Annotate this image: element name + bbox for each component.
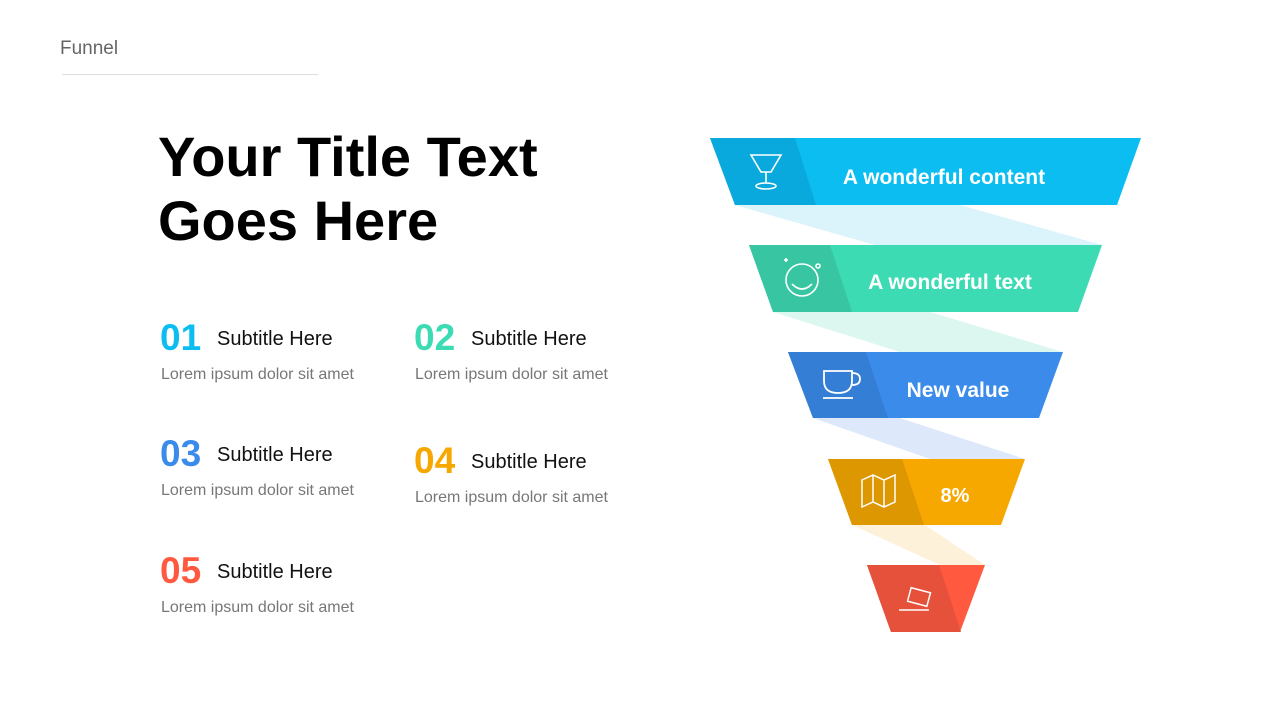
icon: eraser	[899, 588, 930, 610]
band 4	[828, 459, 1025, 525]
title: Goes Here	[158, 189, 438, 252]
item 02: Subtitle Here	[471, 328, 587, 350]
title	[158, 125, 538, 252]
item 01	[160, 317, 354, 383]
icon: face	[784, 258, 820, 296]
band 1: A wonderful content	[843, 166, 1045, 189]
item 02: Lorem ipsum dolor sit amet	[415, 366, 608, 383]
item 04: 04	[414, 440, 455, 481]
band 3: New value	[907, 379, 1009, 402]
item 03: Lorem ipsum dolor sit amet	[161, 482, 354, 499]
band 5	[867, 565, 985, 632]
item 05	[160, 550, 354, 616]
item 02	[414, 317, 608, 383]
icon: trophy	[751, 155, 781, 189]
band 4: 8%	[941, 485, 970, 507]
item 01: Lorem ipsum dolor sit amet	[161, 366, 354, 383]
header underline	[62, 74, 318, 75]
item 03: 03	[160, 433, 201, 474]
item 05: 05	[160, 550, 201, 591]
item 05: Subtitle Here	[217, 561, 333, 583]
item 02: 02	[414, 317, 455, 358]
item 04	[414, 440, 608, 506]
connector ribbons	[735, 205, 1102, 565]
item 05: Lorem ipsum dolor sit amet	[161, 599, 354, 616]
icon: map	[862, 475, 895, 507]
band 3	[788, 352, 1063, 418]
item 01: Subtitle Here	[217, 328, 333, 350]
header label: Funnel	[60, 38, 118, 59]
band 2	[749, 245, 1102, 312]
item 03: Subtitle Here	[217, 444, 333, 466]
item 01: 01	[160, 317, 201, 358]
item 04: Lorem ipsum dolor sit amet	[415, 489, 608, 506]
icon: cup	[823, 371, 860, 398]
band 1	[710, 138, 1141, 205]
title: Your Title Text	[158, 125, 538, 188]
item 03	[160, 433, 354, 499]
item 04: Subtitle Here	[471, 451, 587, 473]
band 2: A wonderful text	[868, 271, 1032, 294]
